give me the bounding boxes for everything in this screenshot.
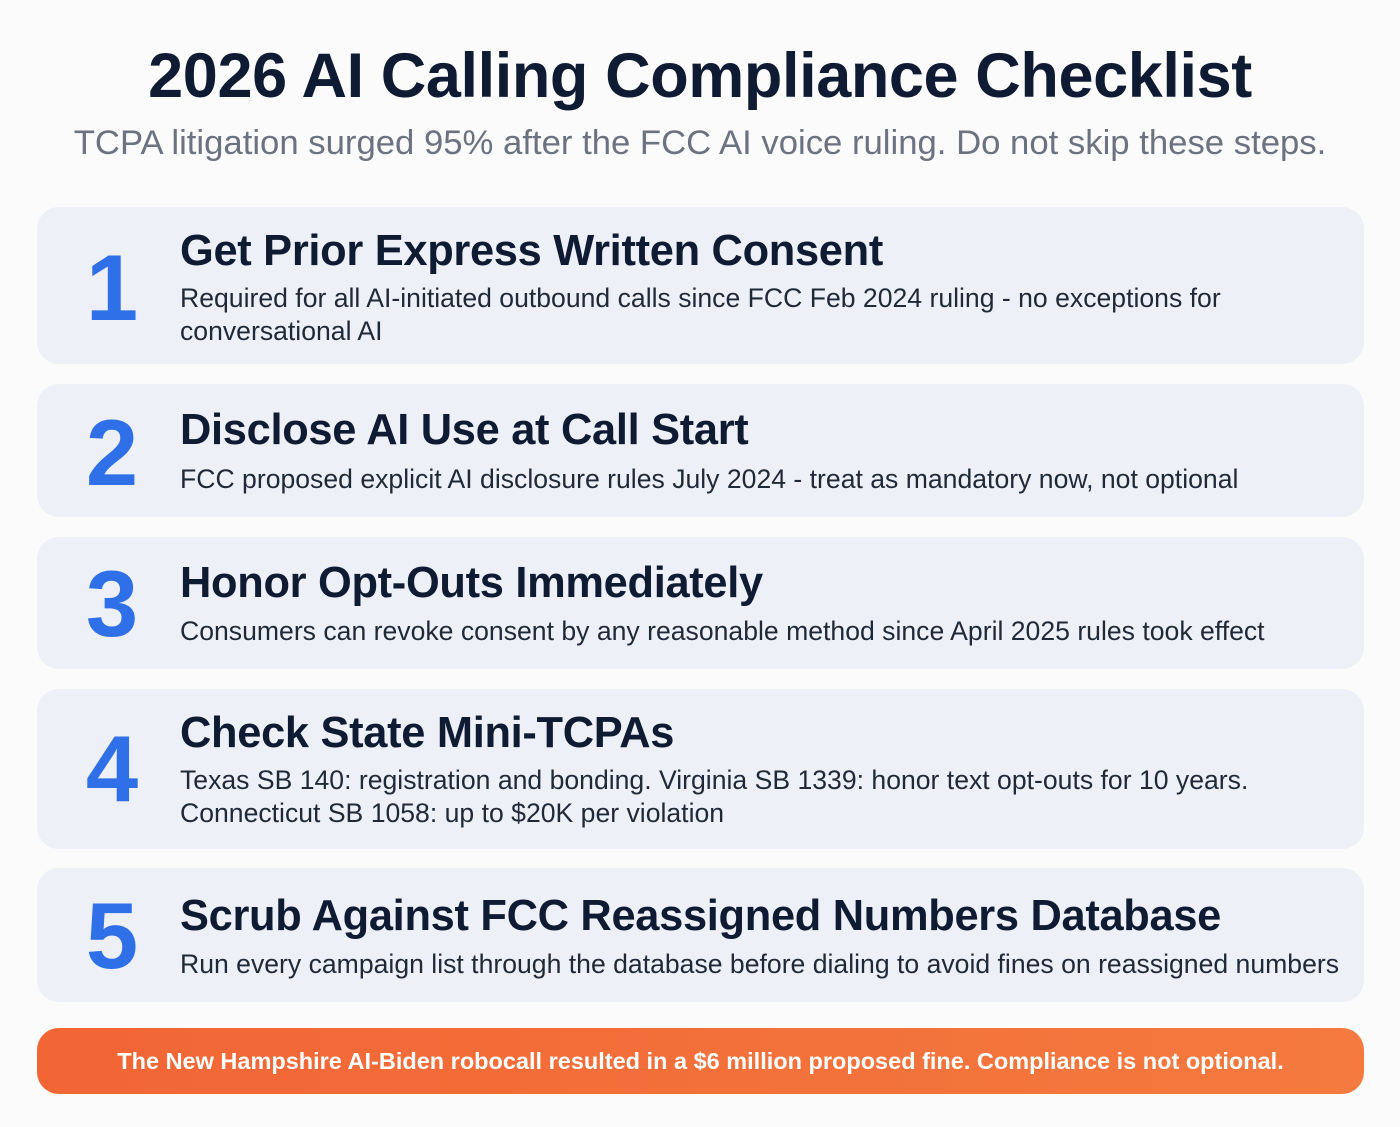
heading 2: Disclose AI Use at Call Start xyxy=(180,406,748,454)
heading 4: Check State Mini-TCPAs xyxy=(180,709,674,757)
panel: step 2 xyxy=(37,384,1364,517)
panel: step 1 xyxy=(37,207,1364,364)
body 3: Consumers can revoke consent by any reasonable method since April 2025 rules took effect xyxy=(180,616,1265,646)
body 4: Connecticut SB 1058: up to $20K per violation xyxy=(180,798,724,828)
body 1: conversational AI xyxy=(180,316,383,346)
body 2: FCC proposed explicit AI disclosure rules July 2024 - treat as mandatory now, not optional xyxy=(180,464,1238,494)
callout banner xyxy=(37,1028,1364,1094)
panel: step 3 xyxy=(37,537,1364,669)
heading 3: Honor Opt-Outs Immediately xyxy=(180,559,763,607)
heading 1: Get Prior Express Written Consent xyxy=(180,227,883,275)
panel: step 4 xyxy=(37,689,1364,849)
number 2: 2 xyxy=(86,400,138,505)
body 5: Run every campaign list through the database before dialing to avoid fines on reassigned numbers xyxy=(180,949,1339,979)
number 5: 5 xyxy=(86,883,138,988)
callout banner: The New Hampshire AI-Biden robocall resulted in a $6 million proposed fine. Compliance is not optional. xyxy=(117,1048,1284,1074)
body 4: Texas SB 140: registration and bonding. Virginia SB 1339: honor text opt-outs for 10 years. xyxy=(180,765,1248,795)
number 4: 4 xyxy=(86,716,138,821)
title: 2026 AI Calling Compliance Checklist xyxy=(148,41,1252,111)
body 4 xyxy=(180,765,1248,828)
number 1: 1 xyxy=(86,235,138,340)
panel: step 5 xyxy=(37,868,1364,1002)
subtitle: TCPA litigation surged 95% after the FCC AI voice ruling. Do not skip these steps. xyxy=(74,124,1326,162)
heading 5: Scrub Against FCC Reassigned Numbers Database xyxy=(180,892,1221,940)
number 3: 3 xyxy=(86,551,138,656)
body 1: Required for all AI-initiated outbound calls since FCC Feb 2024 ruling - no exceptions for xyxy=(180,283,1221,313)
body 1 xyxy=(180,283,1221,346)
